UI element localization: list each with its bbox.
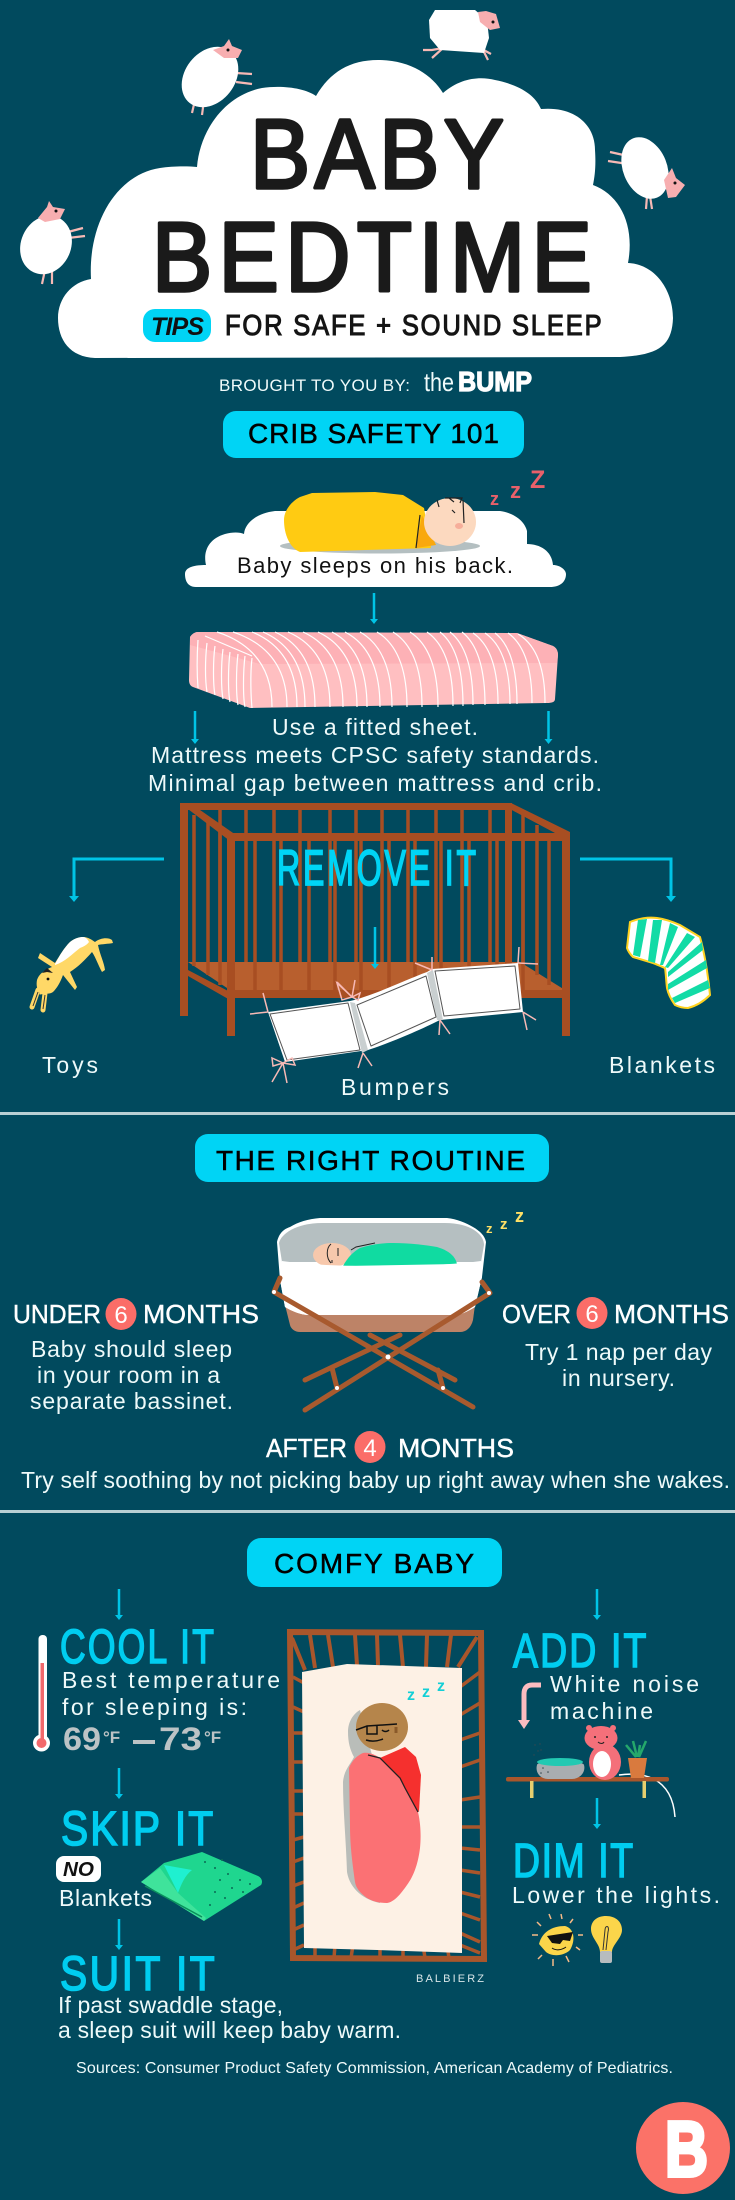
icon: green blanket [141,1852,262,1921]
snore letters [486,1206,524,1236]
dim it: Lower the lights. [512,1882,720,1908]
sponsor line [219,366,532,397]
sheep 2 [423,10,500,60]
sheet [302,1664,462,1953]
artist signature: BALBIERZ [416,1973,484,1985]
over 6 months: MONTHS [614,1299,729,1329]
snore letters: z [437,1678,445,1695]
remove labels: Blankets [609,1052,715,1078]
sheep 3 [608,130,685,209]
over 6 months: Try 1 nap per day [525,1339,712,1365]
over 6 months: OVER [502,1299,571,1329]
arrow: add to dim [593,1798,601,1829]
bassinet [272,1206,524,1410]
over 6 months: 6 [585,1301,599,1328]
sponsor line: the [424,367,454,397]
add it: ADD IT [513,1625,646,1678]
snore letters [490,466,545,509]
caption: Baby sleeps on his back. [237,553,513,578]
dim it [512,1835,720,1908]
connector arrows to toys and blankets [69,859,676,902]
snore letters: z [422,1684,430,1701]
logo: the bump b: B [665,2105,708,2193]
arrows beside mattress [191,711,552,744]
temperature range: 69 [63,1721,101,1757]
arrows under comfy baby [115,1589,601,1620]
under 6 months: Baby should sleep [31,1336,232,1362]
subtitle: FOR SAFE + SOUND SLEEP [225,308,602,341]
after 4 months: MONTHS [398,1433,514,1463]
under 6 months: MONTHS [143,1299,259,1329]
sheep 4 [11,201,85,284]
title [152,100,592,312]
baby on back [280,492,480,554]
no tag [56,1856,101,1882]
swaddled baby [343,1703,421,1903]
logo: the bump b [636,2102,730,2194]
snore letters [407,1678,445,1704]
snore letters: z [486,1221,493,1236]
skip it: SKIP IT [61,1803,213,1856]
after 4 months: Try self soothing by not picking baby up right away when she wakes. [21,1467,730,1493]
under 6 months: separate bassinet. [30,1388,233,1414]
icon: light bulb [591,1916,622,1963]
noise machine [533,1743,584,1779]
no tag: NO [63,1859,94,1881]
cool it: Best temperature [62,1667,280,1693]
icon: thermometer [33,1635,50,1752]
suit it: If past swaddle stage, [58,1992,283,2018]
sources: Sources: Consumer Product Safety Commission, American Academy of Pediatrics. [76,2060,673,2077]
snore letters: z [510,478,521,503]
sponsor line: BUMP [458,366,532,397]
after 4 months [21,1431,730,1493]
title: BABY [250,100,504,209]
small cloud with sleeping baby [185,466,566,587]
after 4 months: 4 [363,1435,377,1462]
snore letters: z [407,1687,415,1704]
mattress tips text: Use a fitted sheet. [272,714,478,740]
under 6 months: UNDER [13,1299,101,1329]
temperature range: °F [103,1728,120,1747]
shelf with noise machine, bear and plant [506,1725,675,1817]
title: BEDTIME [152,203,592,312]
arrow: cool to skip [115,1768,123,1799]
sheep 1 [170,36,252,118]
remove labels [42,1052,715,1100]
mattress [189,632,558,708]
potted plant [626,1741,647,1778]
crib frame [290,1632,484,1959]
temperature range: °F [204,1728,221,1747]
mattress tips text: Minimal gap between mattress and crib. [148,770,602,796]
section pill: crib safety 101 [223,411,524,458]
add it: White noise [550,1671,699,1697]
arrow: cloud to mattress [370,593,378,624]
header cloud [58,60,673,358]
remove labels: Toys [42,1052,98,1078]
snore letters: z [500,1216,508,1233]
small cloud [185,511,566,587]
temperature range [63,1721,221,1757]
section pill: the right routine: THE RIGHT ROUTINE [216,1145,525,1176]
icon: toy bunny [32,937,113,1010]
over 6 months [502,1297,729,1391]
icon: sun with sunglasses [532,1914,583,1966]
add it [513,1625,699,1724]
section pill: comfy baby: COMFY BABY [274,1548,474,1579]
icon: striped blanket [627,918,710,1008]
suit it: a sleep suit will keep baby warm. [58,2017,401,2043]
icon: bumper panels [250,947,538,1083]
top-view crib with swaddled baby [290,1632,484,1959]
suit it: SUIT IT [60,1948,215,2001]
snore letters: z [490,489,499,509]
cool it: for sleeping is: [62,1694,247,1720]
temperature range: 73 [159,1721,202,1757]
mattress tips text: Mattress meets CPSC safety standards. [151,742,599,768]
section pill: comfy baby [247,1538,502,1587]
over 6 months: in nursery. [562,1365,675,1391]
remove it heading: REMOVE IT [277,840,476,896]
suit it [58,1948,401,2043]
bear toy [584,1725,621,1780]
under 6 months [13,1298,259,1414]
dim it: DIM IT [513,1835,633,1888]
snore letters: z [515,1206,524,1226]
sponsor line: BROUGHT TO YOU BY: [219,376,410,395]
baby in bassinet [313,1243,457,1267]
mattress tips text [148,714,602,796]
crib [180,803,570,1036]
cool it [60,1620,280,1757]
cool it: COOL IT [60,1620,214,1673]
after 4 months: AFTER [266,1433,347,1463]
section pill: crib safety 101: CRIB SAFETY 101 [248,418,499,449]
arrow: skip to suit [115,1919,123,1950]
section pill: the right routine [195,1134,549,1182]
arrow: remove it [371,927,379,969]
remove labels: Bumpers [341,1074,449,1100]
under 6 months: 6 [114,1302,128,1329]
blankets label: Blankets [59,1885,152,1911]
snore letters: Z [530,466,545,494]
pink arrow [518,1685,541,1729]
under 6 months: in your room in a [37,1362,220,1388]
subtitle: TIPS [151,313,204,341]
add it: machine [550,1698,653,1724]
